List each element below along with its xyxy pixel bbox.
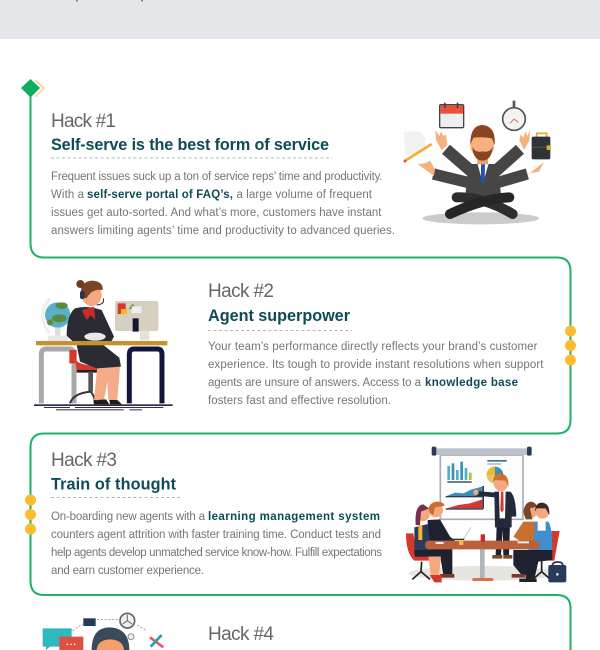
desk legs and floor <box>34 349 173 410</box>
hack 2 body: knowledge base <box>425 377 518 389</box>
icon: envelope <box>83 618 96 626</box>
icon: paper and pencil <box>403 132 432 162</box>
icon: tools <box>150 635 163 647</box>
panel: hack 2 text <box>208 281 544 407</box>
icon: briefcase <box>532 133 550 159</box>
pie chart <box>487 460 507 483</box>
hack 1 body <box>51 171 395 237</box>
panel: hack 1 text <box>51 111 395 237</box>
hack 3 label: Hack #3 <box>51 450 117 471</box>
hack 2 body <box>208 341 544 407</box>
yellow dots left <box>25 494 36 534</box>
presenter <box>473 474 516 559</box>
panel: hack 3 text <box>51 450 382 577</box>
hack 3 body: On-boarding new agents with a <box>51 511 206 523</box>
presentation board <box>432 447 532 519</box>
desk top <box>36 341 167 345</box>
hack 3 body: and earn customer experience. <box>51 565 204 577</box>
hack 1 body: Frequent issues suck up a ton of service reps’ time and productivity. <box>51 171 382 183</box>
top grey band <box>0 0 600 39</box>
hack 1 body: a large volume of frequent <box>236 189 373 201</box>
hack 2 body: experience. Its tough to provide instant resolutions when support <box>208 359 544 371</box>
hack 2 body: agents are unsure of answers. Access to a <box>208 377 422 389</box>
hack 3 heading: Train of thought <box>51 476 177 494</box>
area chart blue <box>447 487 482 496</box>
hack 1 body: issues get auto-sorted. And what’s more, customers have instant <box>51 207 382 219</box>
hack 2 body: fosters fast and effective resolution. <box>208 395 391 407</box>
left attendees <box>406 502 455 582</box>
illustration: agent with tools and chat icons <box>43 613 163 650</box>
hack 3 body: learning management system <box>208 511 380 523</box>
illustration: meditating multitasking man <box>403 101 550 224</box>
icon: stopwatch <box>503 101 525 130</box>
hack 1 body: With a <box>51 189 85 201</box>
agent head <box>92 627 134 650</box>
start marker diamond <box>21 79 44 98</box>
hack 4 label: Hack #4 <box>208 624 274 645</box>
right attendees <box>512 502 566 582</box>
area chart red <box>447 499 482 508</box>
hack 2 body: Your team’s performance directly reflects your brand’s customer <box>208 341 538 353</box>
hack 1 body: answers limiting agents’ time and productivity to advanced queries. <box>51 225 395 237</box>
icon: monitor <box>115 301 158 340</box>
illustration: team meeting with presentation board <box>406 447 566 582</box>
icon: red chat bubble <box>59 637 83 650</box>
green connector line <box>30 88 570 650</box>
illustration: support agent at desk <box>34 280 173 410</box>
hack 1 body: self-serve portal of FAQ’s, <box>87 189 233 201</box>
hack 1 heading: Self-serve is the best form of service <box>51 136 329 154</box>
icon: bag <box>548 562 566 582</box>
icon: globe <box>42 298 70 341</box>
agent figure <box>67 280 122 404</box>
hack 1 label: Hack #1 <box>51 111 116 132</box>
icon: calendar <box>440 103 464 128</box>
meeting table <box>425 527 540 581</box>
hack 3 body: help agents develop unmatched service know-how. Fulfill expectations <box>51 547 382 559</box>
hack 3 body <box>51 511 382 577</box>
man figure <box>418 125 544 214</box>
bar chart <box>447 462 472 483</box>
yellow dots right <box>565 326 576 366</box>
hack 2 heading: Agent superpower <box>208 307 351 325</box>
hack 2 label: Hack #2 <box>208 281 274 302</box>
icon: clock <box>120 613 135 628</box>
hack 3 body: counters agent attrition with faster training time. Conduct tests and <box>51 529 381 541</box>
icon: teal chat bubble <box>43 628 72 650</box>
